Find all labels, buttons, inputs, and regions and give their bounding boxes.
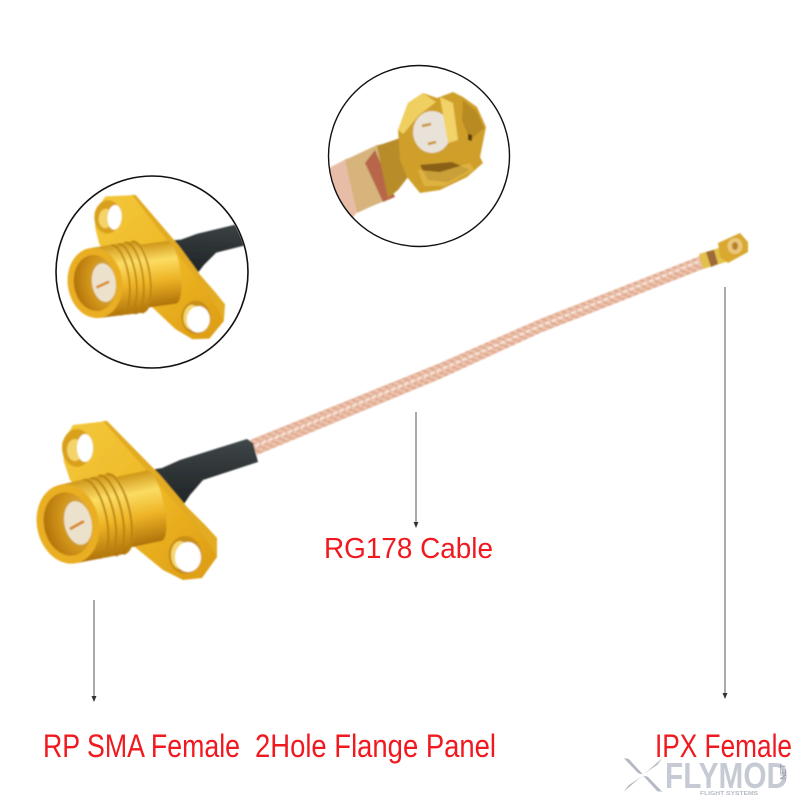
watermark logo: [624, 755, 788, 797]
arrow: RG178: [414, 412, 418, 528]
label: RP SMA Female 2Hole Flange Panel: RP SMA Female: [43, 728, 240, 764]
RP SMA flange connector: [29, 421, 258, 580]
RG178 cable: [250, 256, 703, 455]
arrow: IPX: [722, 287, 728, 699]
inset: IPX close-up: [325, 66, 510, 246]
IPX connector tip: [699, 233, 748, 269]
label: RP SMA Female 2Hole Flange Panel: [43, 728, 496, 764]
label: RP SMA Female 2Hole Flange Panel: 2Hole Flange Panel: [255, 728, 496, 764]
watermark logo: FLIGHT SYSTEMS: [700, 791, 759, 797]
watermark logo: .NET: [779, 764, 788, 782]
label: RG178 Cable: RG178 Cable: [324, 533, 493, 565]
inset: SMA close-up: [56, 176, 268, 368]
cable assembly photo: [29, 233, 748, 580]
arrow: RP SMA: [92, 600, 96, 702]
